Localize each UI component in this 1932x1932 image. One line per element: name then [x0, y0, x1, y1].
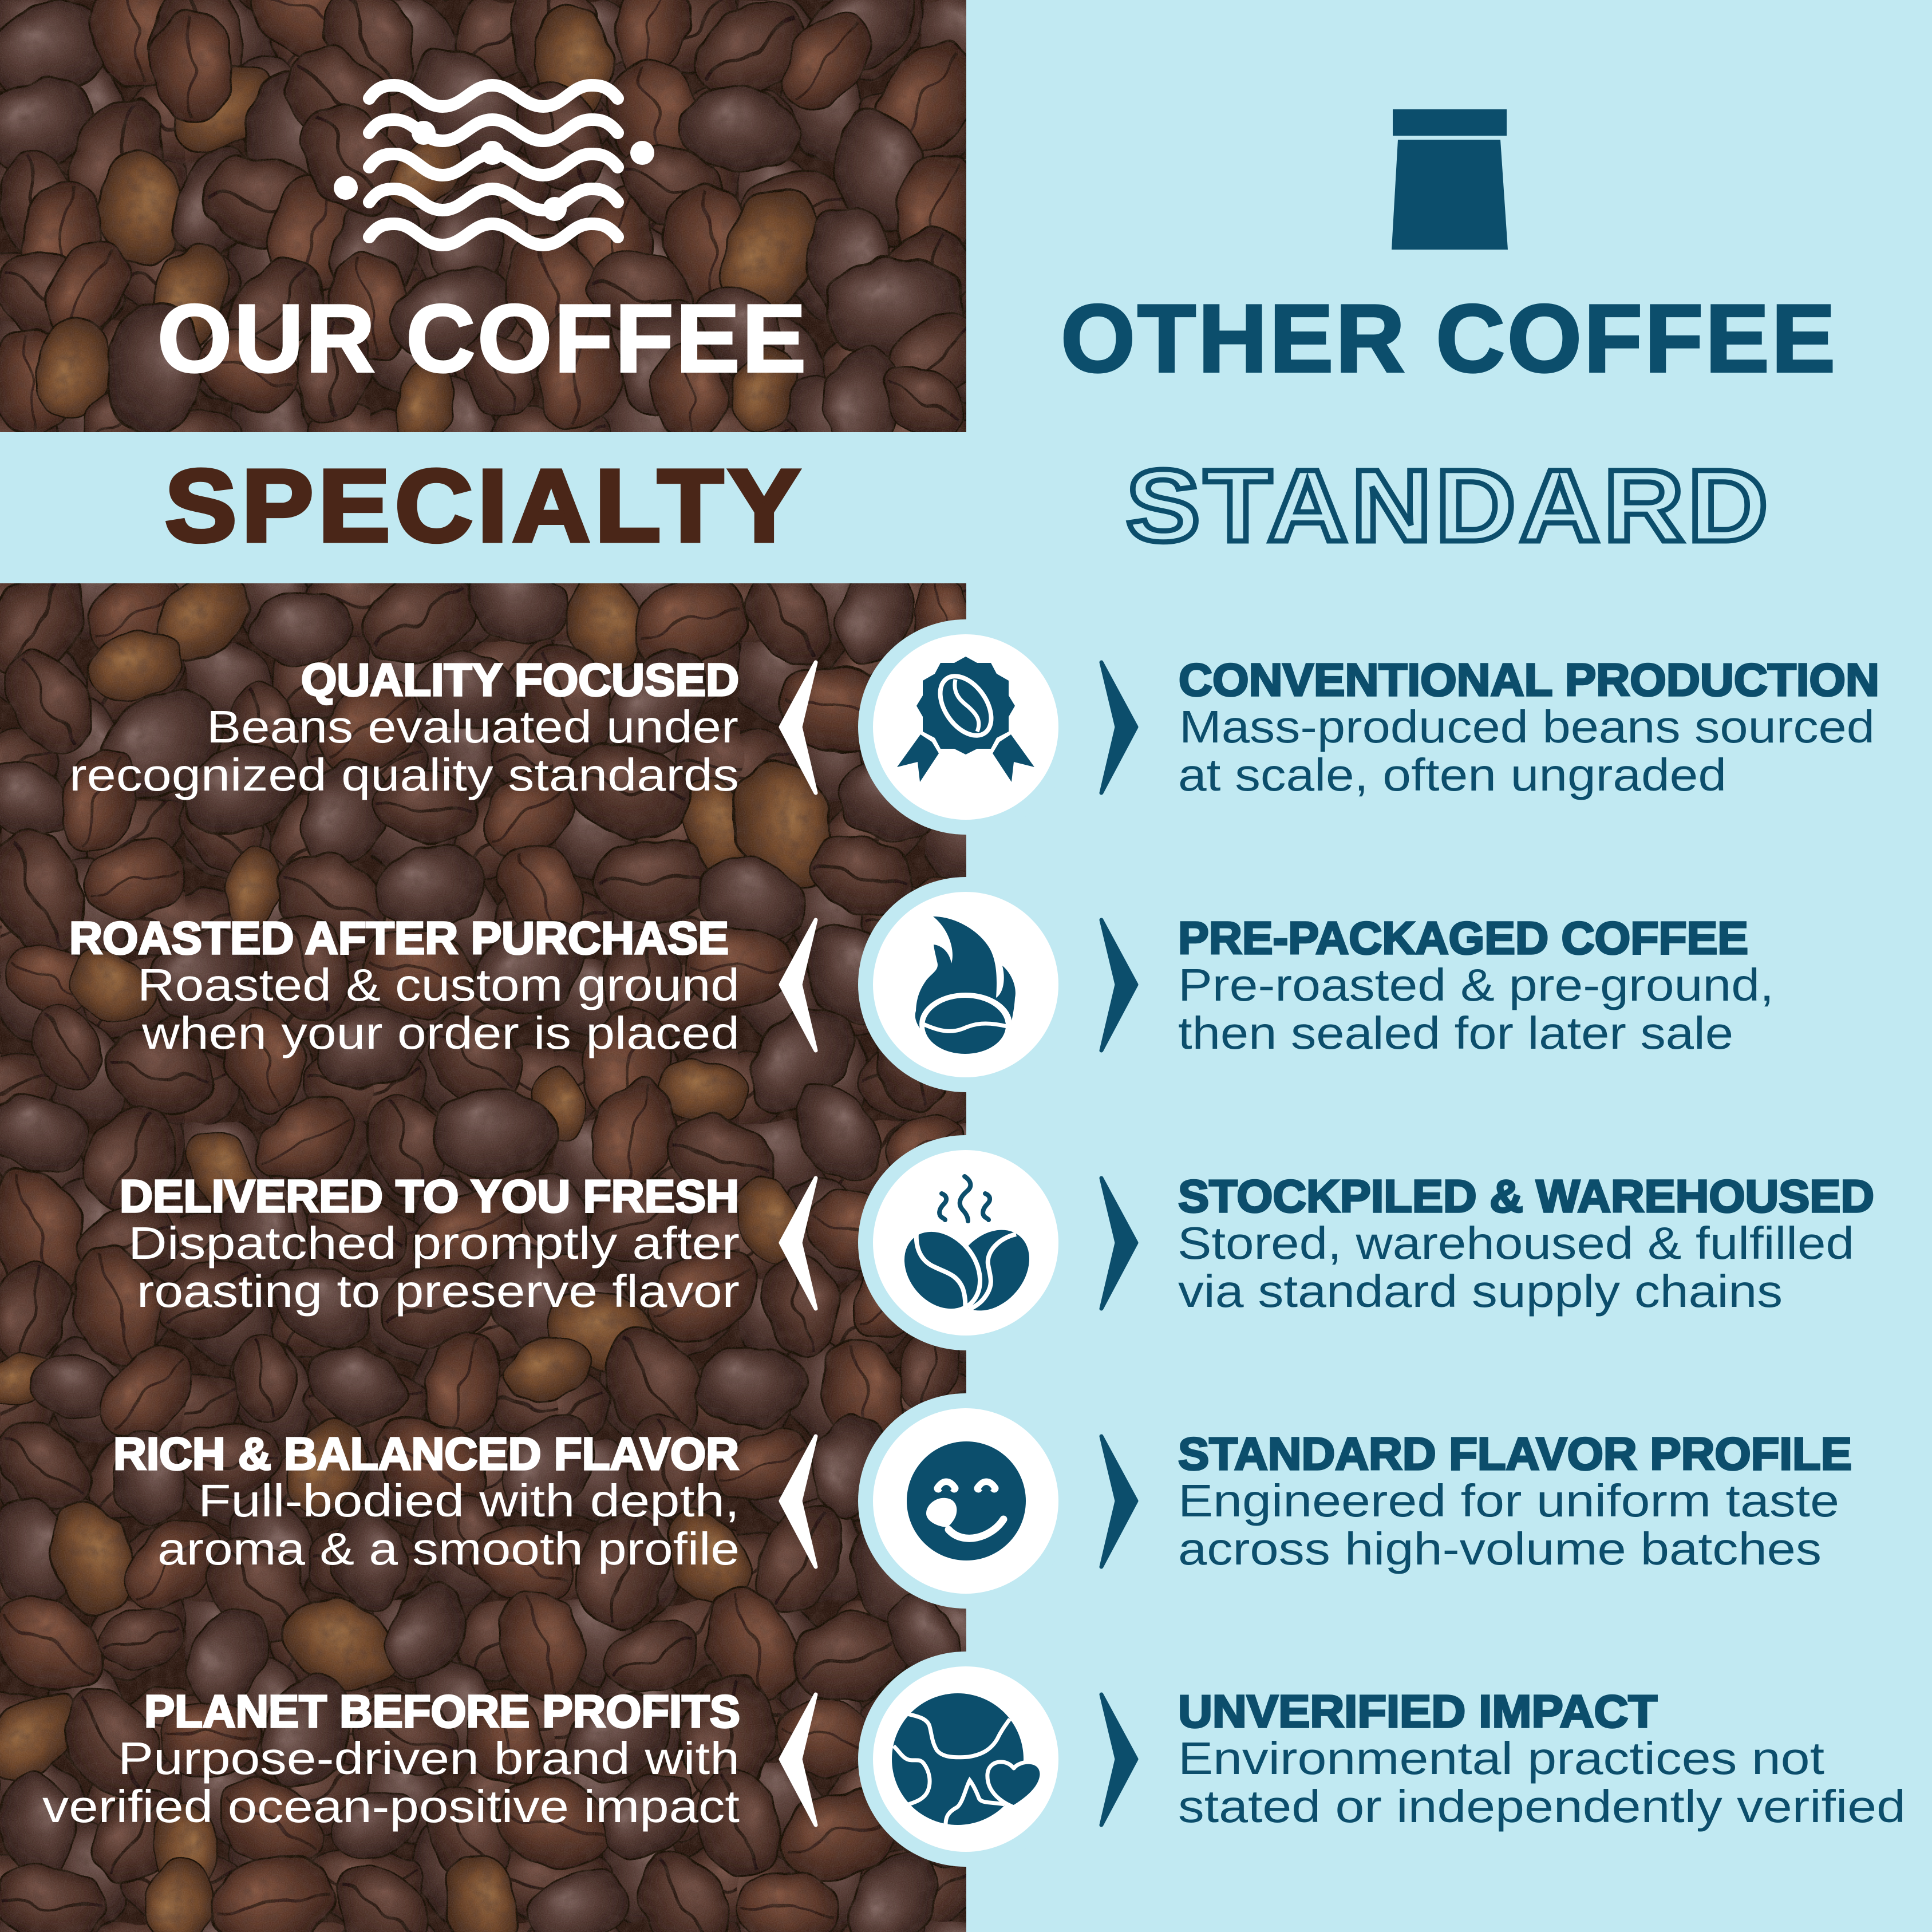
arrow: left chevron: [781, 1178, 816, 1309]
text: quality focused: recognized quality standards: [69, 749, 739, 800]
text: stockpiled and warehoused: Stored, warehoused & fulfilled: [1178, 1218, 1854, 1269]
heading: our coffee: OUR COFFEE: [157, 285, 808, 392]
icon: quality badge: [858, 619, 1073, 835]
icon: coffee bag: [1392, 109, 1508, 250]
row 4: rich flavor vs standard flavor: [113, 1393, 1852, 1609]
text: pre-packaged coffee: PRE-PACKAGED COFFEE: [1178, 912, 1748, 963]
text: roasted after purchase: ROASTED AFTER PURCHASE: [69, 912, 729, 963]
text: standard flavor profile: [1178, 1428, 1852, 1574]
text: delivered to you fresh: DELIVERED TO YOU FRESH: [120, 1171, 739, 1222]
arrow: right chevron: [1101, 920, 1136, 1050]
text: planet before profits: verified ocean-positive impact: [42, 1781, 740, 1832]
text: pre-packaged coffee: then sealed for later sale: [1178, 1008, 1733, 1058]
text: unverified impact: stated or independently verified: [1178, 1781, 1906, 1832]
row 2: roasted vs pre-packaged: [69, 877, 1774, 1092]
icon: flame and bean: [858, 877, 1073, 1092]
icon: globe with heart: [858, 1652, 1073, 1867]
text: rich and balanced flavor: RICH & BALANCED FLAVOR: [113, 1428, 739, 1479]
text: pre-packaged coffee: Pre-roasted & pre-ground,: [1178, 959, 1774, 1010]
text: roasted after purchase: [69, 912, 740, 1058]
text: unverified impact: Environmental practices not: [1178, 1733, 1824, 1784]
arrow: left chevron: [781, 662, 816, 793]
heading: other coffee: OTHER COFFEE: [1061, 285, 1838, 392]
text: stockpiled and warehoused: via standard supply chains: [1178, 1266, 1783, 1317]
panel: coffee bean photo background: [0, 0, 1000, 1932]
text: roasted after purchase: Roasted & custom ground: [137, 959, 740, 1010]
arrow: right chevron: [1101, 1436, 1136, 1567]
text: unverified impact: [1178, 1686, 1906, 1832]
text: standard flavor profile: across high-volume batches: [1178, 1523, 1822, 1574]
row 3: delivered vs stockpiled: [120, 1135, 1874, 1350]
arrow: left chevron: [781, 920, 816, 1050]
icon: smiling face: [858, 1393, 1073, 1609]
arrow: right chevron: [1101, 1178, 1136, 1309]
text: delivered to you fresh: roasting to preserve flavor: [137, 1266, 740, 1317]
text: standard flavor profile: STANDARD FLAVOR PROFILE: [1178, 1428, 1852, 1479]
text: rich and balanced flavor: [113, 1428, 740, 1574]
text: roasted after purchase: when your order is placed: [141, 1008, 740, 1058]
text: planet before profits: [42, 1686, 740, 1832]
icon: steaming beans: [858, 1135, 1073, 1350]
row 5: planet vs unverified: [42, 1652, 1906, 1867]
text: planet before profits: Purpose-driven brand with: [118, 1733, 740, 1784]
panel: specialty band: [0, 432, 966, 583]
text: rich and balanced flavor: aroma & a smooth profile: [157, 1523, 740, 1574]
text: unverified impact: UNVERIFIED IMPACT: [1178, 1686, 1657, 1737]
text: conventional production: at scale, often ungraded: [1178, 749, 1726, 800]
text: conventional production: [1178, 654, 1879, 800]
text: delivered to you fresh: [120, 1171, 740, 1317]
arrow: left chevron: [781, 1694, 816, 1825]
text: rich and balanced flavor: Full-bodied with depth,: [198, 1475, 740, 1526]
arrow: right chevron: [1101, 1694, 1136, 1825]
text: planet before profits: PLANET BEFORE PROFITS: [144, 1686, 740, 1737]
text: quality focused: QUALITY FOCUSED: [301, 654, 739, 705]
text: delivered to you fresh: Dispatched promptly after: [128, 1218, 740, 1269]
text: conventional production: Mass-produced beans sourced: [1179, 701, 1875, 752]
text: pre-packaged coffee: [1178, 912, 1774, 1058]
text: stockpiled and warehoused: STOCKPILED & WAREHOUSED: [1178, 1171, 1874, 1222]
heading: specialty: SPECIALTY: [165, 448, 805, 563]
arrow: left chevron: [781, 1436, 816, 1567]
text: conventional production: CONVENTIONAL PRODUCTION: [1179, 654, 1879, 705]
arrow: right chevron: [1101, 662, 1136, 793]
text: quality focused: [69, 654, 739, 800]
text: stockpiled and warehoused: [1178, 1171, 1874, 1317]
text: quality focused: Beans evaluated under: [207, 701, 738, 752]
heading: standard: STANDARD: [1126, 448, 1772, 563]
icon: wave logo: [334, 85, 654, 245]
text: standard flavor profile: Engineered for uniform taste: [1178, 1475, 1839, 1526]
row 1: quality vs conventional: [69, 619, 1879, 835]
